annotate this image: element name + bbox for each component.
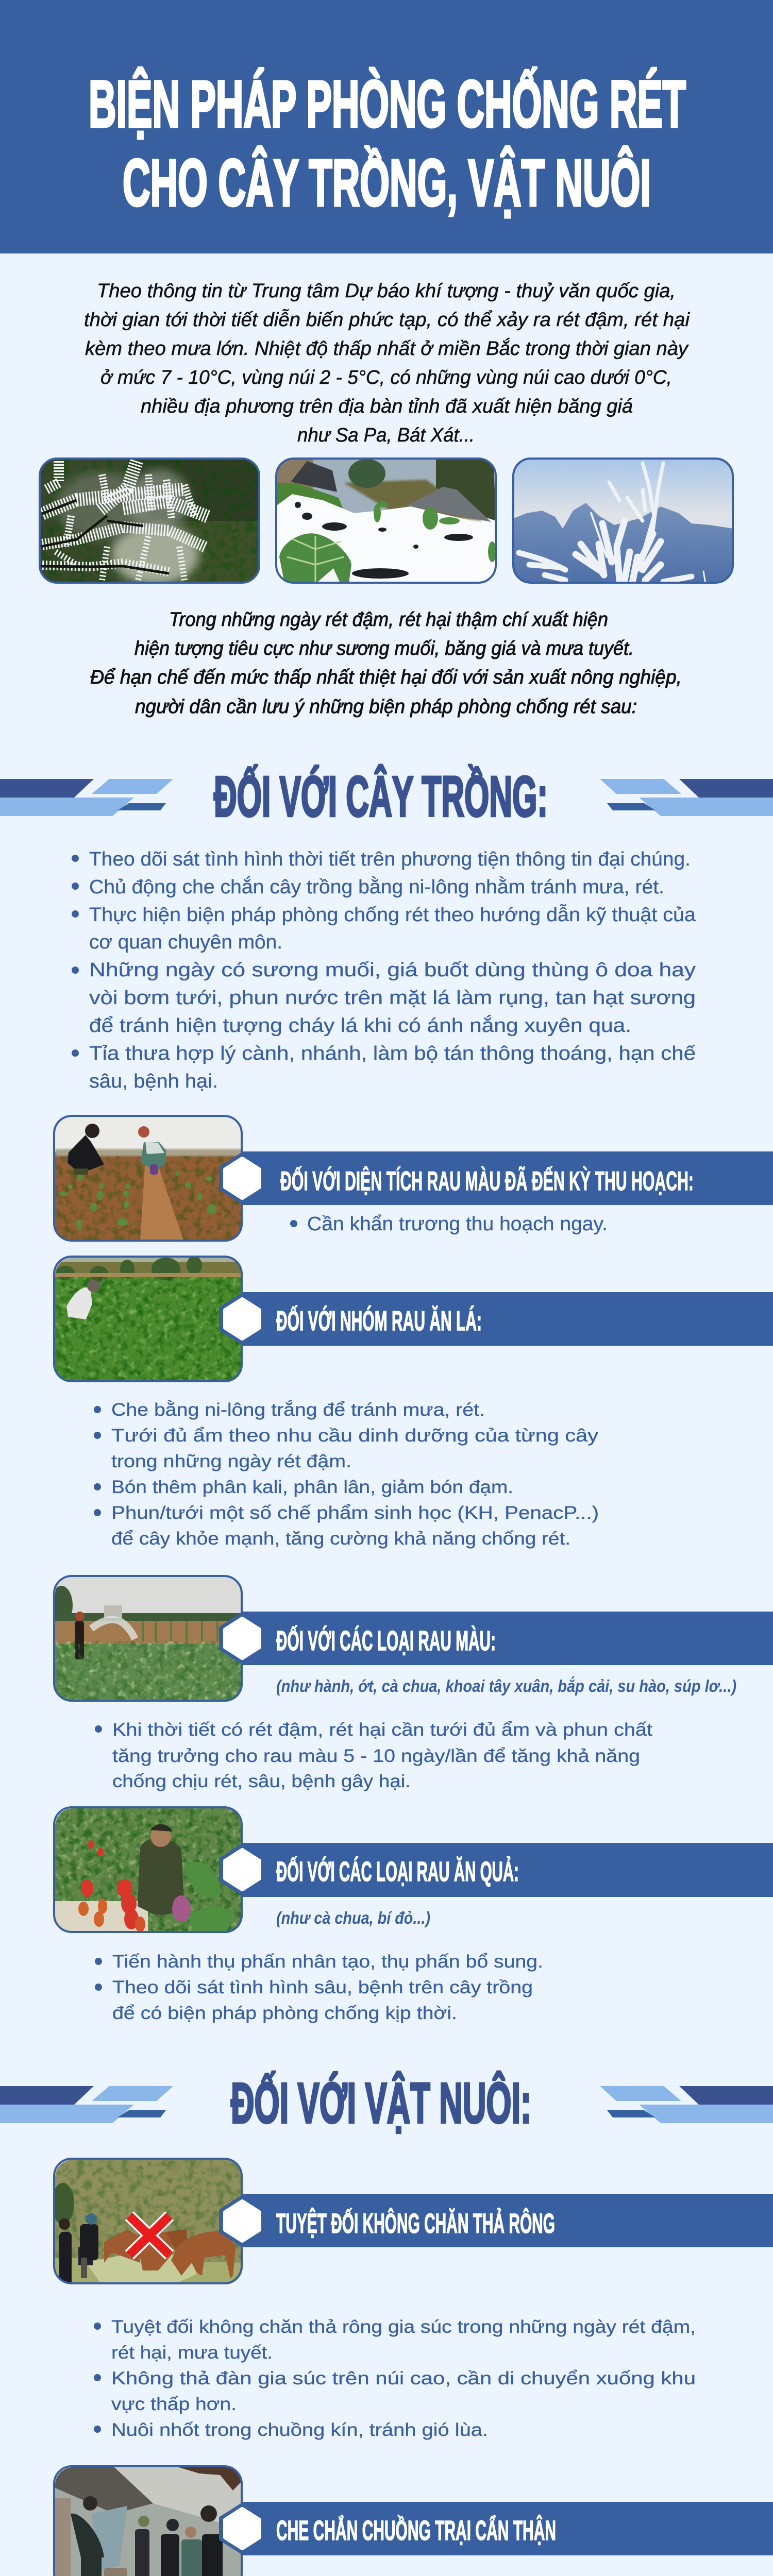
banner title: ĐỐI VỚI CÁC LOẠI RAU MÀU: [276,1625,496,1656]
no free grazing bullet list: Tuyệt đối không chăn thả rông gia súc trong những ngày rét đậm, [111,2316,696,2337]
leafy vegetables bullet list: Tưới đủ ẩm theo nhu cầu dinh dưỡng của từng cây [111,1425,598,1446]
fruit vegetables bullet list: Tiến hành thụ phấn nhân tạo, thụ phấn bổ sung. [112,1951,543,1972]
bullet: Cần khẩn trương thu hoạch ngay. [307,1213,608,1235]
no free grazing bullet list: rét hại, mưa tuyết. [111,2342,273,2363]
intro paragraph: kèm theo mưa lớn. Nhiệt độ thấp nhất ở miền Bắc trong thời gian này [85,337,689,360]
crops general bullet list: để tránh hiện tượng cháy lá khi có ánh nắng xuyên qua. [89,1014,631,1037]
root vegetables bullet list: chống chịu rét, sâu, bệnh gây hại. [112,1771,411,1791]
photo: farmers in soil field [54,1116,243,1242]
banner title: ĐỐI VỚI CÁC LOẠI RAU ĂN QUẢ: [276,1856,519,1887]
panel: leafy vegetables [54,1256,773,1382]
root vegetables bullet list: Khi thời tiết có rét đậm, rét hại cần tưới đủ ẩm và phun chất [112,1719,652,1740]
intro paragraph [84,280,691,446]
banner [242,2502,773,2555]
banner [242,1292,773,1346]
panel: harvest-ready crops [54,1116,773,1242]
no free grazing bullet list [94,2316,696,2440]
subtitle: (như cà chua, bí đỏ...) [276,1908,430,1927]
photo: frost-covered plant with mountains [513,459,733,583]
crops general bullet list: Những ngày có sương muối, giá buốt dùng thùng ô doa hay [89,959,696,981]
fruit vegetables bullet list [95,1951,543,2023]
photo: tomato greenhouse [54,1807,243,1933]
fruit vegetables bullet list: để có biện pháp phòng chống kịp thời. [112,2003,457,2023]
photo: people at shelter [54,2466,243,2576]
section heading: livestock: ĐỐI VỚI VẬT NUÔI: [231,2072,531,2135]
header banner [0,0,773,253]
photo: snow on cabbage field [276,459,496,583]
banner title: CHE CHẮN CHUỒNG TRẠI CẨN THẬN [276,2515,556,2546]
hexagon badge [221,1155,263,1202]
photo: watering cabbage field [50,1576,243,1702]
no free grazing bullet list: vực thấp hơn. [111,2394,237,2414]
second intro paragraph: hiện tượng tiêu cực như sương muối, băng giá và mưa tuyết. [135,638,634,659]
crops general bullet list: Theo dõi sát tình hình thời tiết trên phương tiện thông tin đại chúng. [89,849,691,870]
panel: cover barns [54,2466,773,2576]
banner title: TUYỆT ĐỐI KHÔNG CHĂN THẢ RÔNG [276,2208,555,2239]
hexagon badge [221,1846,263,1893]
crops general bullet list: Tỉa thưa hợp lý cành, nhánh, làm bộ tán thông thoáng, hạn chế [89,1043,696,1064]
panel: fruit vegetables [54,1807,773,1933]
root vegetables bullet list [95,1719,652,1791]
second intro paragraph: Trong những ngày rét đậm, rét hại thậm chí xuất hiện [169,609,608,631]
intro paragraph: Theo thông tin từ Trung tâm Dự báo khí tượng - thuỷ văn quốc gia, [97,280,676,302]
crops general bullet list: sâu, bệnh hại. [89,1071,218,1092]
photo: cattle with red cross [52,2159,243,2286]
photo: frosted tree [40,459,260,585]
root vegetables bullet list: tăng trưởng cho rau màu 5 - 10 ngày/lần để tăng khả năng [112,1745,640,1766]
fruit vegetables bullet list: Theo dõi sát tình hình sâu, bệnh trên cây trồng [112,1977,533,1997]
panel: root and fruit-bearing vegetables [50,1576,773,1702]
leafy vegetables bullet list [94,1399,599,1549]
hexagon badge [221,2505,263,2552]
icon: red cross [129,2216,170,2255]
photo: man in green field [54,1256,243,1382]
leafy vegetables bullet list: để cây khỏe mạnh, tăng cường khả năng chống rét. [111,1528,570,1549]
leafy vegetables bullet list: Che bằng ni-lông trắng để tránh mưa, rét. [111,1399,485,1420]
panel: no free grazing [52,2159,773,2286]
hexagon badge [221,1615,263,1662]
banner [242,1612,773,1665]
crops general bullet list: Chủ động che chắn cây trồng bằng ni-lông nhằm tránh mưa, rét. [89,876,664,898]
crops general bullet list: Thực hiện biện pháp phòng chống rét theo hướng dẫn kỹ thuật của [89,904,696,926]
banner [242,1151,773,1205]
section heading: livestock [0,2072,773,2135]
no free grazing bullet list: Không thả đàn gia súc trên núi cao, cần di chuyển xuống khu [111,2368,696,2388]
crops general bullet list [72,849,696,1092]
second intro paragraph [90,609,682,718]
intro paragraph: thời gian tới thời tiết diễn biến phức tạp, có thể xảy ra rét đậm, rét hại [84,308,691,331]
crops general bullet list: cơ quan chuyên môn. [89,931,282,953]
second intro paragraph: người dân cần lưu ý những biện pháp phòng chống rét sau: [135,696,637,718]
intro paragraph: như Sa Pa, Bát Xát... [297,425,475,446]
leafy vegetables bullet list: Bón thêm phân kali, phân lân, giảm bón đạm. [111,1477,513,1497]
leafy vegetables bullet list: trong những ngày rét đậm. [111,1451,351,1471]
second intro paragraph: Để hạn chế đến mức thấp nhất thiệt hại đối với sản xuất nông nghiệp, [90,667,682,688]
intro paragraph: ở mức 7 - 10°C, vùng núi 2 - 5°C, có những vùng núi cao dưới 0°C, [100,367,672,388]
no free grazing bullet list: Nuôi nhốt trong chuồng kín, tránh gió lùa. [111,2419,488,2440]
banner [242,2194,773,2247]
leafy vegetables bullet list: Phun/tưới một số chế phẩm sinh học (KH, PenacP...) [111,1502,599,1523]
banner title: ĐỐI VỚI NHÓM RAU ĂN LÁ: [276,1306,482,1336]
hexagon badge [221,2197,263,2245]
intro paragraph: nhiều địa phương trên địa bàn tỉnh đã xuất hiện băng giá [141,396,633,417]
banner [242,1843,773,1897]
title [89,67,686,220]
hexagon badge [221,1295,263,1343]
crops general bullet list: vòi bơm tưới, phun nước trên mặt lá làm rụng, tan hạt sương [89,987,696,1009]
